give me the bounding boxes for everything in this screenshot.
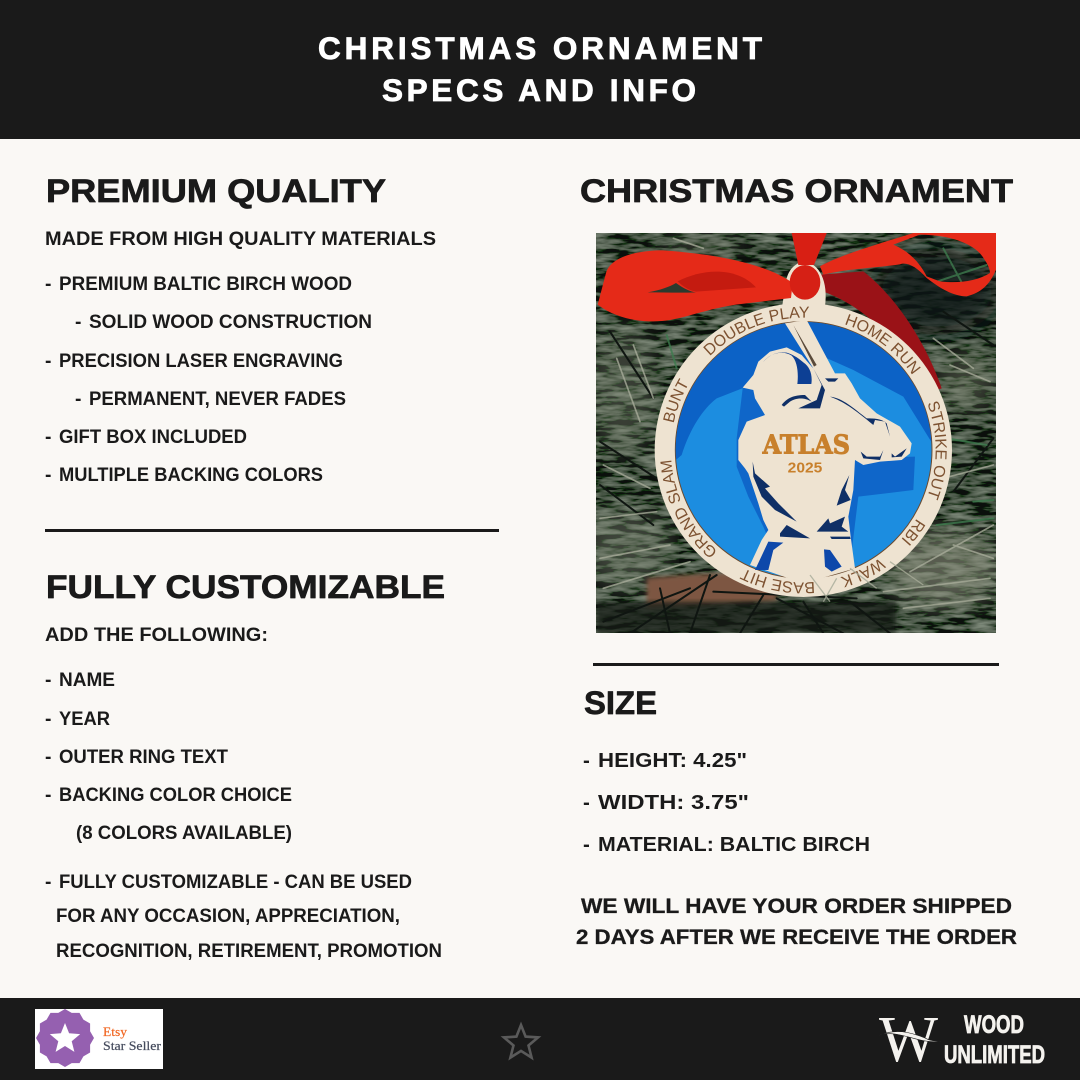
blue backing xyxy=(670,318,937,578)
text block: customization list: ADD THE FOLLOWING: xyxy=(45,625,268,646)
text block: customization list: - xyxy=(45,785,51,806)
ornament xyxy=(654,263,952,597)
ring engraved words: STRIKE OUT xyxy=(928,402,947,500)
text block: customization list: - xyxy=(45,872,51,893)
badge: etsy star seller xyxy=(35,1009,163,1069)
ring engraved words: DOUBLE PLAY xyxy=(703,306,810,356)
ribbon left loop xyxy=(598,250,793,321)
ring engraved words: GRAND SLAM xyxy=(660,460,716,557)
text block: customization list: FULLY CUSTOMIZABLE - CAN BE USED xyxy=(59,872,412,893)
text block: premium quality list: SOLID WOOD CONSTRUCTION xyxy=(89,312,372,333)
heading: size: SIZE xyxy=(584,685,657,721)
text block: size specs: - xyxy=(583,791,590,814)
text block: premium quality list: - xyxy=(75,312,81,333)
text block: size specs: HEIGHT: 4.25" xyxy=(598,749,747,772)
heading: christmas ornament: CHRISTMAS ORNAMENT xyxy=(580,173,1014,209)
photo: baseball ornament on pine branch xyxy=(596,233,996,633)
ribbon knot xyxy=(790,265,820,300)
text block: size specs: WIDTH: 3.75" xyxy=(598,791,749,814)
text block: customization list xyxy=(45,625,442,962)
badge: etsy star seller: Etsy xyxy=(103,1024,128,1039)
text block: size specs: MATERIAL: BALTIC BIRCH xyxy=(598,833,870,856)
text block: premium quality list: - xyxy=(45,274,51,295)
text block: premium quality list: - xyxy=(45,351,51,372)
ring engraved words: HOME RUN xyxy=(845,314,921,374)
text block: customization list: RECOGNITION, RETIREMENT, PROMOTION xyxy=(56,941,442,962)
text block: customization list: BACKING COLOR CHOICE xyxy=(59,785,292,806)
text block: premium quality list xyxy=(45,229,436,486)
ring engraved words: WALK xyxy=(840,560,886,588)
text block: customization list: - xyxy=(45,670,51,691)
upper shadow on backing xyxy=(670,318,937,465)
panel: premium quality xyxy=(45,173,436,486)
text block: premium quality list: PRECISION LASER ENGRAVING xyxy=(59,351,343,372)
panel: size xyxy=(583,685,870,856)
logo: wood unlimited: W xyxy=(879,1003,939,1076)
text block: premium quality list: MADE FROM HIGH QUALITY MATERIALS xyxy=(45,229,436,250)
text block: shipping note: WE WILL HAVE YOUR ORDER SHIPPED xyxy=(581,894,1012,918)
ribbon tail behind ornament xyxy=(820,271,942,392)
logo: wood unlimited xyxy=(878,1003,1045,1076)
text block: size specs: - xyxy=(583,749,590,772)
heading: fully customizable: FULLY CUSTOMIZABLE xyxy=(46,569,445,605)
text block: size specs: - xyxy=(583,833,590,856)
text block: premium quality list: - xyxy=(45,465,51,486)
text block: customization list: - xyxy=(45,747,51,768)
red ribbon xyxy=(598,233,996,321)
logo: wood unlimited: WOOD xyxy=(964,1011,1024,1039)
text block: size specs xyxy=(583,749,870,856)
text block: shipping note: 2 DAYS AFTER WE RECEIVE THE ORDER xyxy=(576,925,1017,949)
text block: customization list: OUTER RING TEXT xyxy=(59,747,228,768)
batter shadow on backing xyxy=(736,388,915,548)
text block: customization list: (8 COLORS AVAILABLE) xyxy=(76,823,292,844)
text block: customization list: - xyxy=(45,709,51,730)
heading: premium quality: PREMIUM QUALITY xyxy=(46,173,386,209)
pine background xyxy=(583,233,1000,633)
year engraving: 2025 xyxy=(788,460,822,476)
ribbon right loop xyxy=(820,233,996,296)
title: SPECS AND INFO xyxy=(382,72,696,108)
badge: etsy star seller: Star Seller xyxy=(103,1039,162,1053)
panel: fully customizable xyxy=(45,569,445,962)
wood ring xyxy=(655,303,952,597)
ring engraved words: BASE HIT xyxy=(740,570,814,594)
batter silhouette xyxy=(738,320,912,583)
title xyxy=(318,30,762,108)
footer band xyxy=(0,998,1080,1080)
ring engraved words: RBI xyxy=(902,519,926,546)
ring engraved words: BUNT xyxy=(663,378,688,422)
logo: wood unlimited: UNLIMITED xyxy=(944,1041,1045,1069)
text block: premium quality list: - xyxy=(75,389,81,410)
text block: premium quality list: GIFT BOX INCLUDED xyxy=(59,427,247,448)
text block: shipping note xyxy=(576,894,1017,949)
text block: premium quality list: MULTIPLE BACKING COLORS xyxy=(59,465,323,486)
text block: customization list: FOR ANY OCCASION, APPRECIATION, xyxy=(56,906,400,927)
icon: outline star xyxy=(504,1025,538,1058)
pine needles over ornament bottom xyxy=(810,562,923,602)
name engraving: ATLAS xyxy=(762,430,850,460)
header band xyxy=(0,0,1080,139)
text block: customization list: YEAR xyxy=(59,709,110,730)
hanging loop xyxy=(782,261,826,308)
text block: premium quality list: - xyxy=(45,427,51,448)
ring engraved words xyxy=(660,306,947,594)
text block: premium quality list: PREMIUM BALTIC BIRCH WOOD xyxy=(59,274,352,295)
batter cut lines xyxy=(753,325,907,572)
text block: premium quality list: PERMANENT, NEVER FADES xyxy=(89,389,346,410)
title: CHRISTMAS ORNAMENT xyxy=(318,30,762,66)
ribbon top strand xyxy=(792,233,827,265)
text block: customization list: NAME xyxy=(59,670,115,691)
